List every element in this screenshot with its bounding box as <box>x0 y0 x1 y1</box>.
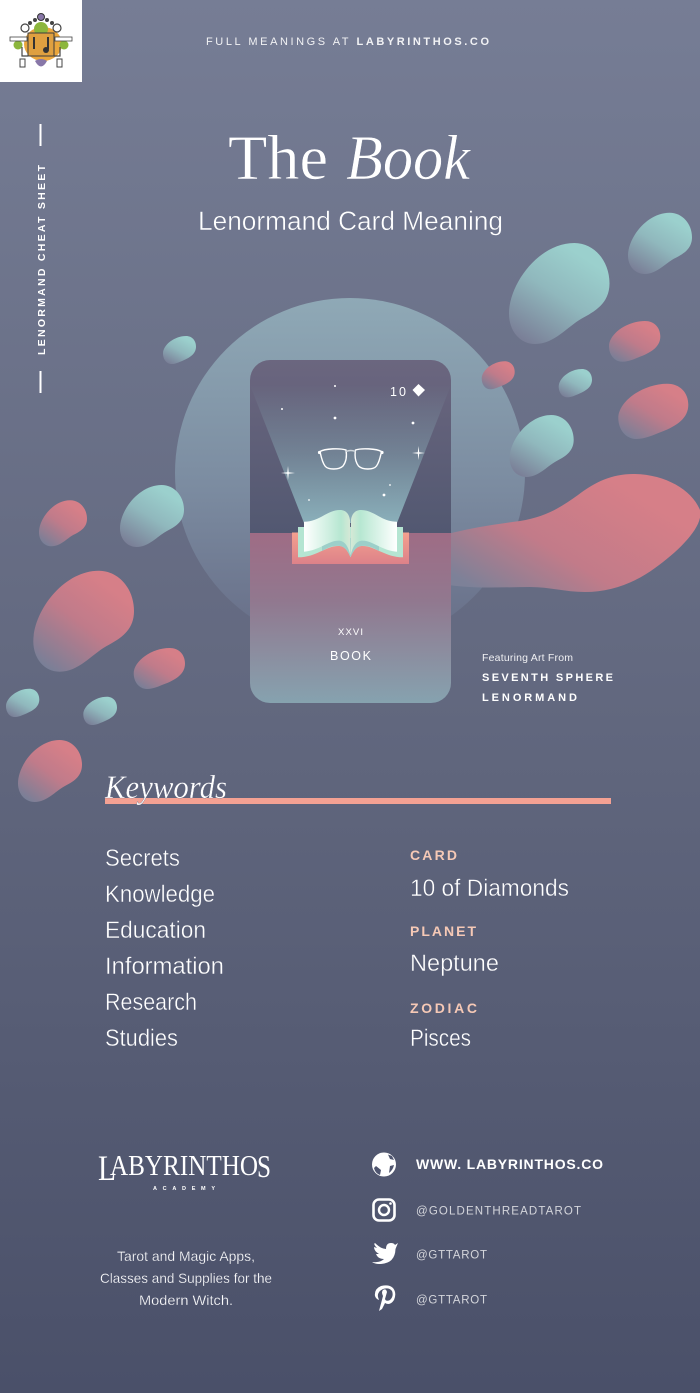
icon: twitter <box>372 1243 398 1264</box>
keyword list: Secrets <box>105 845 180 872</box>
card attributes: PLANET <box>410 923 476 939</box>
card lower panel <box>250 533 451 703</box>
background circle <box>175 298 525 648</box>
academy tagline: Classes and Supplies for the <box>100 1270 272 1286</box>
book cover <box>292 532 409 564</box>
academy tagline: Modern Witch. <box>139 1292 233 1308</box>
title: The <box>228 122 328 193</box>
icon: globe <box>372 1152 396 1176</box>
art credit <box>482 652 613 704</box>
icon: glasses <box>319 449 383 469</box>
academy logo: ABYRINTHO <box>110 1150 258 1182</box>
blob: pink lower left <box>134 648 185 689</box>
logo badge <box>0 0 82 82</box>
icon: diamond suit <box>412 384 425 396</box>
art credit: LENORMAND <box>482 692 577 704</box>
stars <box>281 385 425 501</box>
card numeral: XXVI <box>338 627 363 638</box>
keyword list: Studies <box>105 1025 178 1052</box>
blob: small teal far left <box>6 689 39 717</box>
academy tagline: Tarot and Magic Apps, <box>117 1248 255 1264</box>
card attributes <box>410 847 569 1052</box>
right page <box>351 510 397 555</box>
side label: Lenormand cheat sheet: LENORMAND CHEAT SHEET <box>36 164 48 355</box>
academy logo <box>98 1148 271 1192</box>
card attributes: CARD <box>410 847 457 863</box>
website: WWW. LABYRINTHOS.CO <box>416 1156 603 1172</box>
keywords heading: Keywords <box>104 770 227 806</box>
book back pages <box>298 527 403 557</box>
blob: small teal lower <box>83 697 117 725</box>
art credit: Featuring Art From <box>482 652 573 664</box>
blob: large teal <box>509 243 610 344</box>
light beam <box>250 385 451 523</box>
card attributes: ZODIAC <box>410 1000 477 1016</box>
blob: small teal right <box>559 369 592 397</box>
card attributes: Neptune <box>410 950 499 977</box>
blob: pink bottom left <box>18 740 82 802</box>
keyword list: Knowledge <box>105 881 215 908</box>
subtitle: Lenormand Card Meaning <box>198 206 503 236</box>
instagram handle: @GOLDENTHREADTAROT <box>416 1206 581 1218</box>
blob: large pink left <box>33 571 134 672</box>
keyword list <box>105 845 224 1052</box>
icon: pinterest <box>375 1285 395 1311</box>
academy logo: L <box>98 1148 116 1188</box>
blob: small teal left <box>163 336 196 364</box>
blob: teal left <box>120 485 184 547</box>
title <box>228 122 472 193</box>
header link: FULL MEANINGS AT LABYRINTHOS.CO <box>206 36 489 48</box>
keyword list: Research <box>105 989 197 1016</box>
pinterest handle: @GTTAROT <box>416 1294 487 1306</box>
blob: pink right <box>618 384 688 439</box>
academy logo: S <box>257 1148 271 1184</box>
blob: pink right upper <box>609 321 660 362</box>
keywords heading <box>104 770 611 806</box>
card attributes: Pisces <box>410 1025 471 1052</box>
academy tagline <box>100 1248 272 1308</box>
blob: pink left <box>39 500 87 546</box>
blob: teal centre right <box>510 415 574 477</box>
left page <box>304 510 350 555</box>
card attributes: 10 of Diamonds <box>410 875 569 902</box>
card name: BOOK <box>330 649 372 663</box>
keyword list: Information <box>105 953 224 980</box>
book <box>292 510 409 564</box>
blob: small pink centre <box>482 361 515 389</box>
floating blobs <box>6 213 700 802</box>
icon: instagram <box>374 1200 394 1220</box>
blob: top right teal <box>628 213 692 274</box>
academy logo: ACADEMY <box>153 1186 215 1192</box>
art credit: SEVENTH SPHERE <box>482 672 613 684</box>
keyword list: Education <box>105 917 206 944</box>
card number: 10 <box>390 385 406 399</box>
card upper panel <box>250 360 451 533</box>
book inner shadow <box>322 538 379 557</box>
blob: big pink wave <box>430 474 700 592</box>
twitter handle: @GTTAROT <box>416 1250 487 1262</box>
card <box>250 360 451 703</box>
title: Book <box>346 122 472 193</box>
